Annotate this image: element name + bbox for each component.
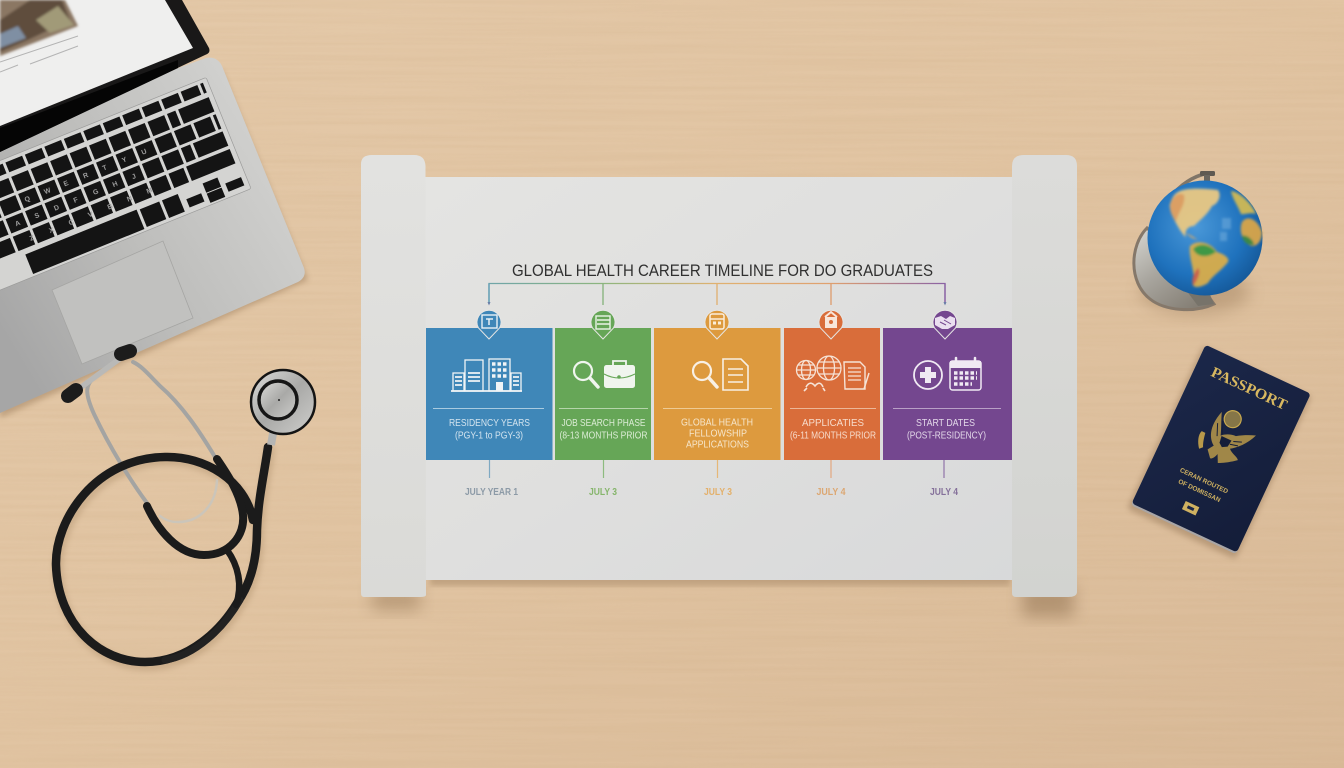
key letters: ZXCVBNM [29,187,154,243]
globe shadow [1140,270,1250,314]
label: (PGY-1 to PGY-3) [455,430,523,442]
date: july 4 purple: JULY 4 [930,486,958,498]
scroll shadow [372,574,1074,617]
icon: hospital buildings [451,359,522,391]
label: FELLOWSHIP [689,428,747,440]
date: july 3 orange [704,460,732,498]
label: START DATES [916,417,975,429]
label: (8-13 MONTHS PRIOR [560,430,648,442]
label [790,417,876,442]
continents [1170,189,1262,287]
label: (POST-RESIDENCY) [907,430,986,442]
label: APPLICATIES [802,417,864,429]
title: GLOBAL HEALTH CAREER TIMELINE FOR DO GRADUATES [512,261,933,280]
icon: magnifier and document [693,359,748,390]
label: (6-11 MONTHS PRIOR [790,430,876,442]
passport caption [1174,467,1229,506]
label: GLOBAL HEALTH [681,416,753,428]
key letters [7,148,162,246]
date: july 4 purple [930,460,958,498]
panel: start dates [883,310,1012,460]
Y branch tube [147,459,243,555]
binaural metal tubes [76,357,215,503]
label [449,417,530,442]
globe stand [1134,171,1215,310]
date: july 3 green [589,460,617,498]
laptop [0,0,308,418]
label [681,416,753,450]
pin icon: application package [819,310,843,339]
pin icon: handshake [933,310,957,339]
tube shadow [58,451,270,666]
keyboard [0,77,251,302]
date: july 3 orange: JULY 3 [704,486,732,498]
trackpad [52,241,193,364]
laptop screen [0,0,210,152]
panel: global health fellowship applications [654,310,780,460]
panel: applications [784,310,880,460]
globe [1134,171,1262,314]
passport [1127,344,1313,560]
laptop body [0,58,305,413]
icon: magnifier and briefcase [574,361,635,388]
laptop shadow [0,70,308,418]
left scroll roll [361,155,426,597]
pin icon: job search [591,310,615,339]
lower branch [227,550,239,605]
icon: globes and document [796,356,869,391]
ear tips [68,351,130,396]
key letters: QWERTYU [24,148,148,204]
date: july 4 orange: JULY 4 [816,486,846,498]
label [907,417,986,442]
passport caption: OF DOMISSAN [1177,478,1222,504]
date: july year 1: JULY YEAR 1 [465,486,518,498]
pin icon: residency [477,310,501,339]
right scroll roll [1012,155,1077,597]
timeline connector [488,284,946,306]
second tube strand along bottom [165,600,240,660]
date: july 4 orange [816,460,846,498]
main rubber tube [56,447,268,662]
passport shadow [1127,346,1312,560]
label: APPLICATIONS [686,438,749,450]
passport eagle emblem [1192,401,1262,473]
panel: residency years [426,310,552,460]
panel: job search phase [555,310,651,460]
key letters: ASDFGHJ [14,173,137,228]
pin icon: applications [705,310,729,339]
date: july 3 green: JULY 3 [589,486,617,498]
date: july year 1 [465,460,518,498]
passport caption: CERAN ROUTED [1179,467,1229,496]
scroll paper [420,177,1020,580]
icon: medical cross and calendar [914,358,981,390]
label [560,417,648,442]
passport title: PASSPORT [1208,365,1289,414]
reflection under headset [160,480,217,522]
chest piece [251,370,315,445]
label: JOB SEARCH PHASE [562,417,646,429]
label: RESIDENCY YEARS [449,417,530,429]
passport chip symbol [1182,501,1199,515]
stethoscope [56,351,315,666]
